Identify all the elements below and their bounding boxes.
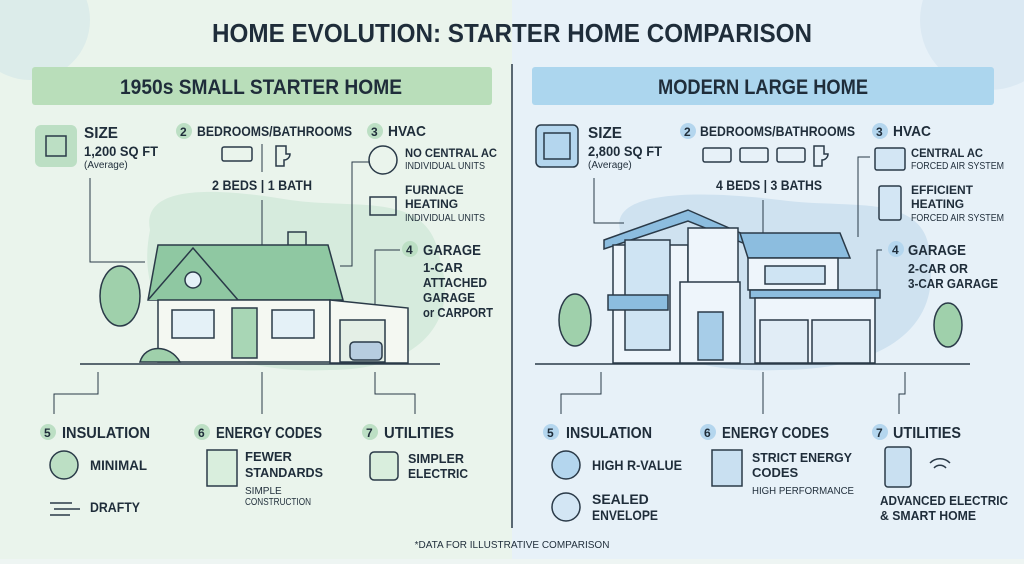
section: energy codes left: STANDARDS	[245, 465, 323, 480]
text: garage: or CARPORT	[423, 305, 493, 320]
section: energy codes left: CONSTRUCTION	[245, 497, 311, 508]
text: size: 2,800 SQ FT	[588, 143, 662, 159]
text: bedrooms: 2	[180, 125, 187, 139]
text: garage: 4	[892, 243, 899, 257]
text: hvac: HEATING	[405, 197, 458, 211]
text: bedrooms: BEDROOMS/BATHROOMS	[197, 123, 352, 139]
text: hvac: EFFICIENT	[911, 183, 974, 197]
text: hvac: HVAC	[388, 123, 426, 140]
section: insulation left: DRAFTY	[90, 499, 141, 515]
right panel	[535, 123, 1004, 370]
icon: size	[536, 125, 578, 167]
section: energy codes left	[194, 424, 323, 508]
section: utilities right: ADVANCED ELECTRIC	[880, 493, 1009, 508]
text: hvac	[872, 123, 1004, 224]
text: hvac	[367, 123, 497, 224]
section: energy codes right: 6	[704, 426, 711, 440]
text: hvac: FURNACE	[405, 183, 464, 197]
section: utilities right: 7	[876, 426, 883, 440]
section: utilities left: SIMPLER	[408, 451, 465, 466]
icon: size	[35, 125, 77, 167]
text: size	[588, 125, 662, 171]
text: hvac: INDIVIDUAL UNITS	[405, 213, 485, 224]
title: HOME EVOLUTION: STARTER HOME COMPARISON	[212, 18, 812, 48]
house: 1950s	[80, 232, 440, 364]
section: insulation left: INSULATION	[62, 425, 150, 442]
text: hvac: HVAC	[893, 123, 931, 140]
section: utilities left: UTILITIES	[384, 425, 454, 442]
text: garage: 2-CAR OR	[908, 261, 969, 276]
section: energy codes left: FEWER	[245, 449, 293, 464]
section: utilities left	[362, 424, 469, 481]
panel: 1950s header: 1950s SMALL STARTER HOME	[120, 76, 402, 99]
section: energy codes left: ENERGY CODES	[216, 425, 322, 442]
panel: 1950s header	[32, 67, 492, 105]
section: insulation right: ENVELOPE	[592, 507, 658, 523]
text: size: (Average)	[84, 160, 128, 171]
section: insulation right: SEALED	[592, 491, 649, 507]
text: hvac: FORCED AIR SYSTEM	[911, 161, 1004, 172]
panel: modern header	[532, 67, 994, 105]
section: insulation right: INSULATION	[566, 425, 652, 442]
section: energy codes left: SIMPLE	[245, 486, 282, 497]
text: garage: GARAGE	[423, 290, 475, 305]
section: insulation left	[40, 424, 150, 515]
section: energy codes right: STRICT ENERGY	[752, 450, 852, 465]
text: garage: 3-CAR GARAGE	[908, 276, 998, 291]
text: size	[84, 125, 158, 171]
text: garage: 1-CAR	[423, 260, 463, 275]
text: hvac: HEATING	[911, 197, 964, 211]
text: garage: ATTACHED	[423, 275, 487, 290]
section: energy codes right	[700, 424, 854, 497]
section: energy codes right: HIGH PERFORMANCE	[752, 486, 854, 497]
text: garage	[888, 241, 998, 291]
left panel	[35, 123, 497, 370]
text: size: 1,200 SQ FT	[84, 143, 158, 159]
section: energy codes right: ENERGY CODES	[722, 425, 829, 442]
section: insulation left: MINIMAL	[90, 457, 147, 473]
section: utilities right	[872, 424, 1009, 523]
section: utilities left: ELECTRIC	[408, 466, 469, 481]
text: hvac: FORCED AIR SYSTEM	[911, 213, 1004, 224]
section: energy codes right: CODES	[752, 465, 799, 480]
text: hvac: NO CENTRAL AC	[405, 146, 497, 160]
text: hvac: 3	[371, 125, 378, 139]
section: utilities right: UTILITIES	[893, 425, 961, 442]
text: hvac: CENTRAL AC	[911, 146, 983, 160]
text: hvac: INDIVIDUAL UNITS	[405, 161, 485, 172]
text: garage: GARAGE	[908, 242, 966, 259]
text: garage	[402, 241, 493, 320]
house: modern	[535, 210, 970, 364]
text: garage: GARAGE	[423, 242, 481, 259]
footnote: *DATA FOR ILLUSTRATIVE COMPARISON	[415, 540, 609, 551]
section: energy codes left: 6	[198, 426, 205, 440]
text: size: SIZE	[84, 125, 118, 142]
text: hvac: 3	[876, 125, 883, 139]
text: bedrooms: 4 BEDS | 3 BATHS	[716, 177, 822, 193]
section: insulation left: 5	[44, 426, 51, 440]
section: insulation right: 5	[547, 426, 554, 440]
text: bedrooms: 2	[684, 125, 691, 139]
section: insulation right	[543, 424, 682, 523]
text: bedrooms: 2 BEDS | 1 BATH	[212, 177, 312, 193]
text: size: SIZE	[588, 125, 622, 142]
text: size: (Average)	[588, 160, 632, 171]
section: utilities left: 7	[366, 426, 373, 440]
text: bedrooms	[680, 123, 855, 193]
text: garage: 4	[406, 243, 413, 257]
section: utilities right: & SMART HOME	[880, 508, 976, 523]
panel: modern header: MODERN LARGE HOME	[658, 76, 868, 99]
text: bedrooms	[176, 123, 352, 193]
text: bedrooms: BEDROOMS/BATHROOMS	[700, 123, 855, 139]
section: insulation right: HIGH R-VALUE	[592, 457, 682, 473]
